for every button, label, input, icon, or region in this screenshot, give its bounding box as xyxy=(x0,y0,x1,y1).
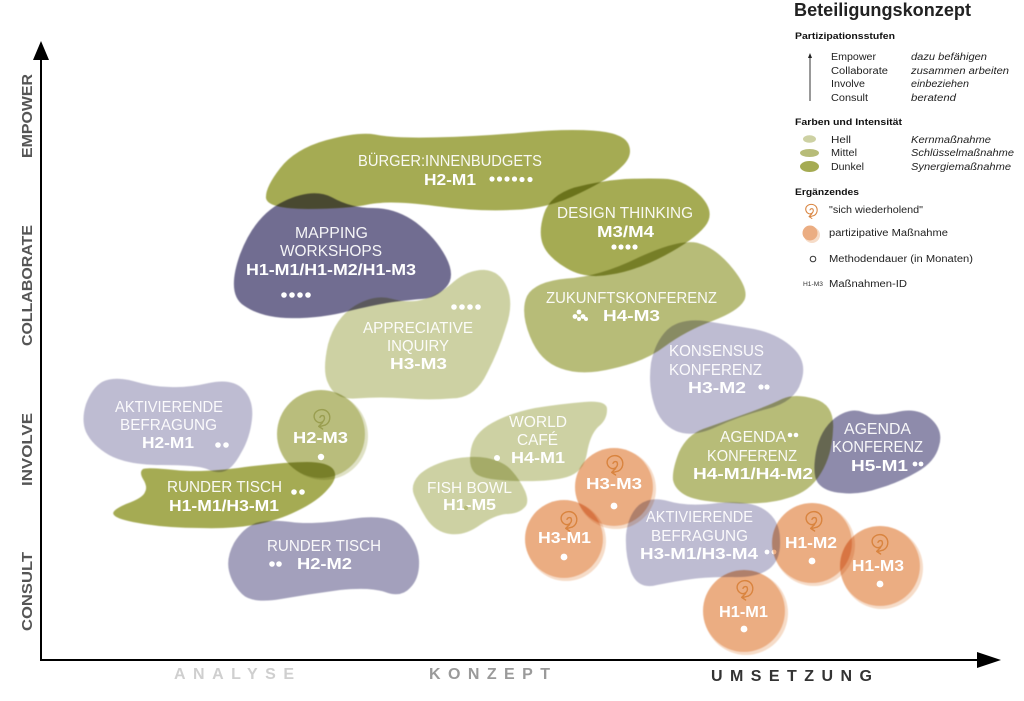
blob: Konsensus Konferenz: H3-M2 xyxy=(688,380,746,397)
blob: Runder Tisch H1 xyxy=(113,462,335,528)
circle: H1-M2: H1-M2 xyxy=(785,535,837,552)
legend rows: participation levels: zusammen arbeiten xyxy=(910,66,1009,77)
x axis arrow xyxy=(40,652,1001,668)
circle: H3-M3 xyxy=(575,448,656,529)
legend rows: participation levels: dazu befähigen xyxy=(911,52,987,63)
blob: Agenda Konferenz H4 xyxy=(673,396,833,503)
legend rows: colours: Dunkel xyxy=(831,162,864,173)
blob: Mapping Workshops: WORKSHOPS xyxy=(280,243,382,260)
blob: World Café: CAFÉ xyxy=(517,432,558,449)
legend rows: participation levels xyxy=(831,52,1009,104)
legend: measure id: Maßnahmen-ID xyxy=(829,279,907,290)
y axis label: Consult: CONSULT xyxy=(19,552,36,631)
blob: World Café: WORLD xyxy=(509,414,567,431)
legend arrow xyxy=(808,53,812,101)
legend: repeating icon: "sich wiederholend" xyxy=(829,205,923,216)
legend rows: participation levels: einbeziehen xyxy=(911,79,969,90)
circle: H1-M3 xyxy=(840,526,923,609)
blob: Runder Tisch H2: RUNDER TISCH xyxy=(267,538,381,555)
blob: World Café: H4-M1 xyxy=(511,450,565,467)
blob: Mapping Workshops: H1-M1/H1-M2/H1-M3 xyxy=(246,262,416,279)
circle: H1-M1 xyxy=(703,570,788,655)
blob: Konsensus Konferenz: KONSENSUS xyxy=(669,343,764,360)
legend rows: colours: Kernmaßnahme xyxy=(911,135,991,146)
circle: H3-M1 xyxy=(525,500,606,581)
legend rows: participation levels: Empower xyxy=(831,52,877,63)
circle: H3-M3: H3-M3 xyxy=(586,476,642,493)
y axis label: Involve: INVOLVE xyxy=(19,413,36,486)
legend heading: Farben und Intensität: Farben und Intensität xyxy=(795,117,903,128)
blob: Fish Bowl: FISH BOWL xyxy=(427,480,512,497)
blob: Fish Bowl xyxy=(413,457,527,534)
legend title: Beteiligungskonzept xyxy=(794,0,971,20)
blob: Design Thinking xyxy=(541,178,710,276)
blob: Aktivierende Befragung H3: H3-M1/H3-M4 xyxy=(640,546,758,563)
x axis label: Konzept: KONZEPT xyxy=(429,666,550,683)
blob: Agenda Konferenz H5 xyxy=(814,410,940,493)
blob: Bürger:innenbudgets xyxy=(266,130,630,210)
blob: Runder Tisch H2: H2-M2 xyxy=(297,556,352,573)
circle: H2-M3 xyxy=(277,390,368,480)
blob: Runder Tisch H1: RUNDER TISCH xyxy=(167,479,282,496)
legend rows: colours: Schlüsselmaßnahme xyxy=(911,148,1014,159)
legend rows: colours: Synergiemaßnahme xyxy=(911,162,1011,173)
legend: measure id: H1-M3 xyxy=(803,281,823,288)
y axis arrow xyxy=(33,41,49,661)
blob: Aktivierende Befragung H3: BEFRAGUNG xyxy=(651,528,748,545)
blob: Design Thinking: M3/M4 xyxy=(597,224,654,241)
legend: participative measure: partizipative Maßnahme xyxy=(829,228,948,239)
blob: Bürger:innenbudgets: H2-M1 xyxy=(424,172,476,189)
legend heading: Partizipationsstufen: Partizipationsstufen xyxy=(795,31,895,42)
blob: Zukunftskonferenz xyxy=(524,242,746,372)
blob: Agenda Konferenz H4: KONFERENZ xyxy=(707,448,797,465)
legend heading: Ergänzendes: Ergänzendes xyxy=(795,187,859,198)
legend rows: participation levels: beratend xyxy=(911,93,956,104)
blob: Runder Tisch H1: H1-M1/H3-M1 xyxy=(169,498,279,515)
blob: Aktivierende Befragung H2: H2-M1 xyxy=(142,435,194,452)
legend: participative measure xyxy=(802,226,948,243)
blob: Aktivierende Befragung H3: AKTIVIERENDE xyxy=(646,509,753,526)
y axis label: Collaborate: COLLABORATE xyxy=(19,225,36,346)
blob: Zukunftskonferenz: ZUKUNFTSKONFERENZ xyxy=(546,290,717,307)
blob: Appreciative Inquiry xyxy=(325,270,510,399)
blob: Aktivierende Befragung H2: AKTIVIERENDE xyxy=(115,399,223,416)
blob: Zukunftskonferenz: H4-M3 xyxy=(603,308,660,325)
blob: Appreciative Inquiry: APPRECIATIVE xyxy=(363,320,473,337)
legend: method duration: Methodendauer (in Monaten) xyxy=(829,254,973,265)
blob: Mapping Workshops: MAPPING xyxy=(295,225,368,242)
legend: measure id xyxy=(803,279,907,290)
blob: World Café xyxy=(470,402,607,481)
blob: Aktivierende Befragung H2 xyxy=(84,379,252,472)
blob: Fish Bowl: H1-M5 xyxy=(443,497,496,514)
blob: Agenda Konferenz H5: AGENDA xyxy=(844,421,912,438)
circle: H2-M3: H2-M3 xyxy=(293,430,348,447)
blob: Agenda Konferenz H5: H5-M1 xyxy=(851,458,908,475)
blob: Appreciative Inquiry: H3-M3 xyxy=(390,356,447,373)
legend: repeating icon xyxy=(806,204,923,218)
blob: Agenda Konferenz H4: AGENDA xyxy=(720,429,787,446)
blob: Aktivierende Befragung H3 xyxy=(626,499,780,586)
y axis label: Empower: EMPOWER xyxy=(19,74,36,158)
legend rows: participation levels: Collaborate xyxy=(831,66,888,77)
blob: Mapping Workshops xyxy=(234,193,451,318)
legend rows: participation levels: Involve xyxy=(831,79,865,90)
circle: H1-M3: H1-M3 xyxy=(852,558,904,575)
legend rows: colours: Hell xyxy=(831,135,851,146)
blob: Konsensus Konferenz: KONFERENZ xyxy=(669,362,762,379)
blob: Design Thinking: DESIGN THINKING xyxy=(557,205,693,222)
circle: H1-M1: H1-M1 xyxy=(719,604,768,621)
circle: H3-M1: H3-M1 xyxy=(538,530,591,547)
blob: Appreciative Inquiry: INQUIRY xyxy=(387,338,449,355)
legend rows: participation levels: Consult xyxy=(831,93,868,104)
circle: H1-M2 xyxy=(772,503,855,586)
blob: Aktivierende Befragung H2: BEFRAGUNG xyxy=(120,417,217,434)
blob: Agenda Konferenz H5: KONFERENZ xyxy=(832,439,923,456)
x axis label: Analyse: ANALYSE xyxy=(174,666,294,683)
blob: Runder Tisch H2 xyxy=(228,517,419,601)
legend xyxy=(794,0,1014,290)
legend rows: colours xyxy=(800,135,1014,173)
blob: Bürger:innenbudgets: BÜRGER:INNENBUDGETS xyxy=(358,152,542,170)
x axis label: Umsetzung: UMSETZUNG xyxy=(711,668,872,685)
blob: Agenda Konferenz H4: H4-M1/H4-M2 xyxy=(693,466,813,483)
blob: Konsensus Konferenz xyxy=(650,320,803,434)
legend rows: colours: Mittel xyxy=(831,148,857,159)
